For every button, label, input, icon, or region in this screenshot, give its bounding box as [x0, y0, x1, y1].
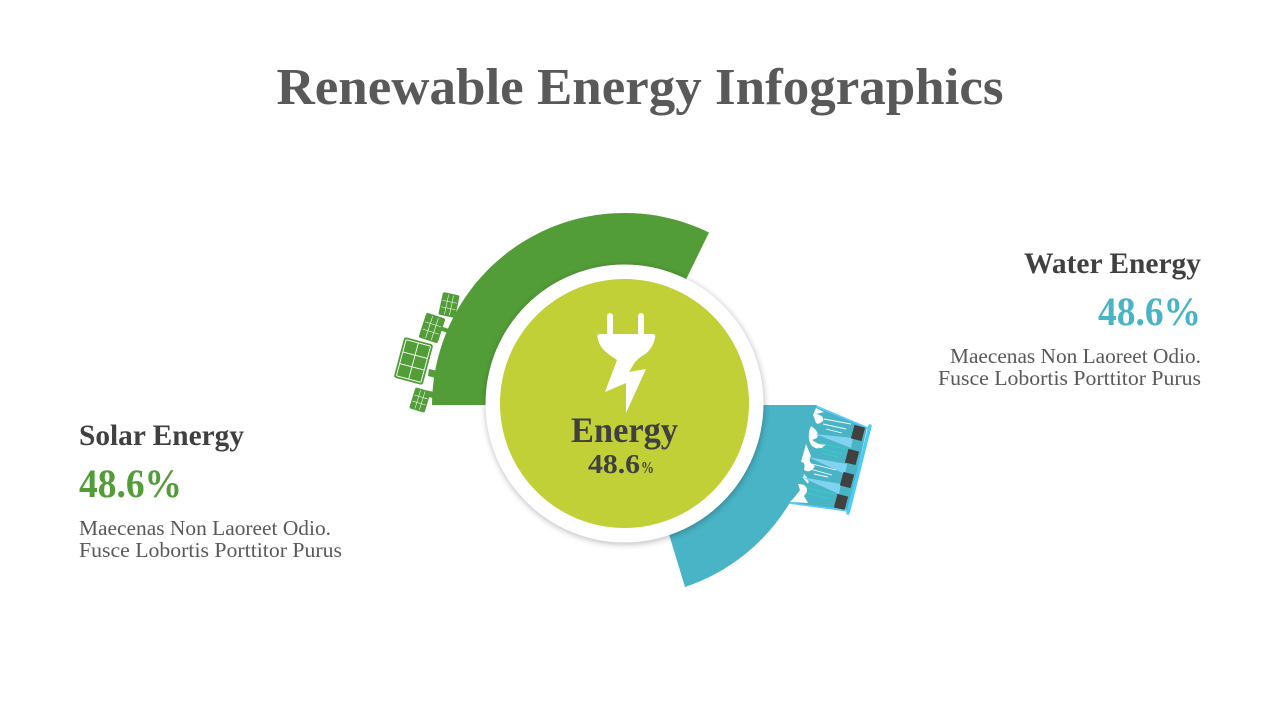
center label: %	[641, 458, 654, 477]
solar panel large	[394, 337, 433, 385]
chart: green solar arc	[432, 213, 709, 405]
description: water	[938, 344, 1201, 390]
panel: water energy text	[938, 247, 1201, 390]
solar panel small top	[438, 292, 460, 318]
dam frame	[816, 406, 868, 428]
panel: solar energy text	[79, 419, 342, 562]
central lime circle	[500, 279, 749, 528]
center label: 48.6	[588, 449, 640, 479]
solar panel medium	[418, 313, 446, 343]
turbine blocks	[834, 425, 865, 510]
heading: water energy: Water Energy	[1024, 247, 1201, 280]
icon: hydro dam	[789, 406, 870, 513]
heading: solar energy: Solar Energy	[79, 419, 244, 452]
value: water percentage: 48.6%	[1098, 289, 1201, 334]
chart: teal water arc	[668, 405, 817, 587]
solar panel small bottom	[409, 387, 431, 413]
circle shadow	[486, 266, 764, 544]
white ring	[486, 264, 764, 542]
water lines	[810, 419, 851, 477]
value: solar percentage: 48.6%	[79, 461, 182, 506]
description: solar: Maecenas Non Laoreet Odio.	[79, 516, 331, 540]
description: solar: Fusce Lobortis Porttitor Purus	[79, 538, 342, 562]
description: water: Maecenas Non Laoreet Odio.	[950, 344, 1201, 368]
center label	[571, 410, 678, 479]
description: water: Fusce Lobortis Porttitor Purus	[938, 366, 1201, 390]
title: Renewable Energy Infographics	[276, 59, 1004, 116]
icon: plug with lightning bolt	[597, 313, 655, 413]
foam	[790, 408, 826, 503]
center label: Energy	[571, 410, 678, 450]
water beams	[801, 434, 853, 494]
icon: solar panels	[394, 292, 460, 413]
description: solar	[79, 516, 342, 562]
